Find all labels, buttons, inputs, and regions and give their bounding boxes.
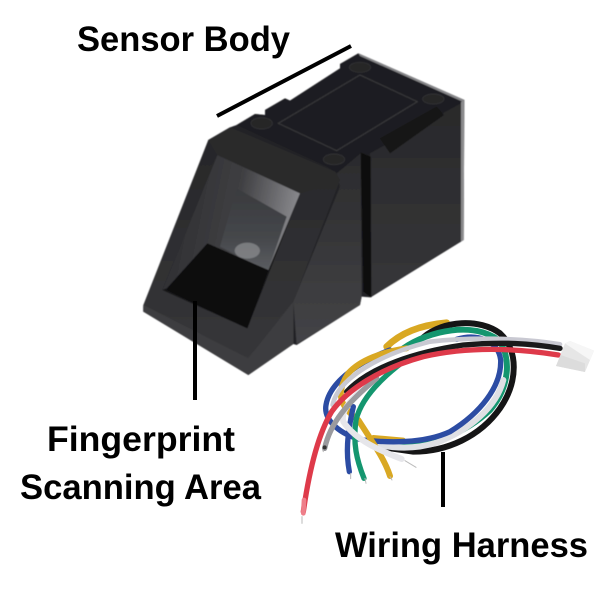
wire: black upper [347,343,560,392]
icon: wiring harness [302,323,594,523]
body silhouette [143,53,464,375]
leader line: wiring harness [441,452,445,507]
leader line: scanning area [193,301,197,400]
leader line: sensor body [217,46,351,116]
icon: fingerprint sensor body [143,53,464,375]
wire: white loop [370,380,503,448]
label: Sensor Body: Sensor Body [77,20,291,59]
icon: connector plug [556,341,594,372]
top plate [237,53,464,173]
wire: white tip [343,383,402,459]
label: Wiring Harness: Wiring Harness [335,526,588,565]
wire: yellow tip [341,348,407,476]
wire: white upper [333,339,560,405]
label: Fingerprint Scanning Area: Scanning Area [20,468,262,507]
wire: black loop [383,323,514,452]
right face [361,100,464,297]
wire: blue tip [347,407,353,472]
middle face [293,153,362,344]
wire: green loop [400,330,507,447]
wire: blue loop [326,337,501,442]
scanning window [162,155,300,328]
wire: red [303,349,558,512]
front frame [143,127,340,375]
wire: grey tip [325,378,377,448]
wire: yellow upper [387,323,447,347]
label: Fingerprint Scanning Area: Fingerprint [47,420,235,459]
label: Fingerprint Scanning Area [20,420,262,507]
wire: green tip [355,362,403,478]
